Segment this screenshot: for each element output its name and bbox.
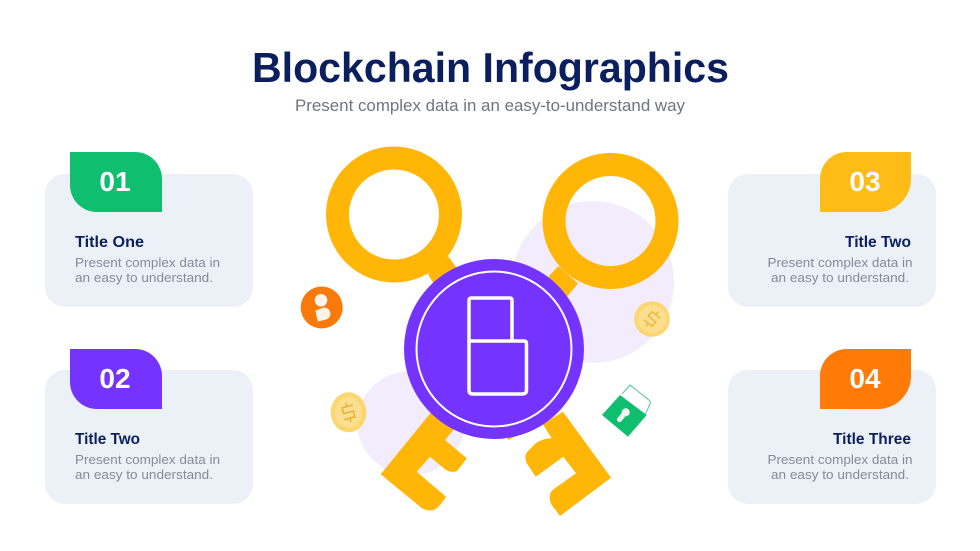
background blob: upper right [512,201,674,363]
icon: orange user badge [301,286,343,328]
number tag 03: 03 [849,166,881,197]
number tag 03 [820,152,911,212]
panel: card 04 [728,349,936,504]
background blob: lower left [357,371,465,475]
number tag 01: 01 [99,166,131,197]
central purple badge [404,259,584,439]
icon: right key [525,164,667,516]
card 04 heading: Title Three [833,431,911,448]
card 01 text: an easy to understand. [75,270,213,285]
card 04 text: an easy to understand. [771,467,909,482]
card 02 heading: Title Two [75,431,140,448]
card 02 text: Present complex data in [75,452,220,467]
icon: coin left [331,392,366,432]
number tag 04: 04 [849,363,881,394]
card 01 text [75,255,220,285]
number tag 04 [820,349,911,409]
icon: left key [338,158,523,510]
number tag 01 [70,152,162,212]
card 01 heading: Title One [75,234,144,251]
icon: green padlock [602,385,650,437]
card 01 text: Present complex data in [75,255,220,270]
card 02 text [75,452,220,482]
card 03 text: an easy to understand. [771,270,909,285]
card 04 text [768,452,912,482]
subtitle: Present complex data in an easy-to-understand way [295,97,686,115]
number tag 02: 02 [99,363,131,394]
card 02 text: an easy to understand. [75,467,213,482]
card 03 text [768,255,912,285]
panel: card 01 [45,152,253,307]
card 04 text: Present complex data in [768,452,912,467]
icon: coin right [634,301,670,337]
number tag 02 [70,349,162,409]
panel: card 02 [45,349,253,504]
title: Blockchain Infographics [252,44,729,91]
card 03 text: Present complex data in [768,255,912,270]
icon: blockchain B [469,298,526,394]
panel: card 03 [728,152,936,307]
card 03 heading: Title Two [845,234,911,251]
